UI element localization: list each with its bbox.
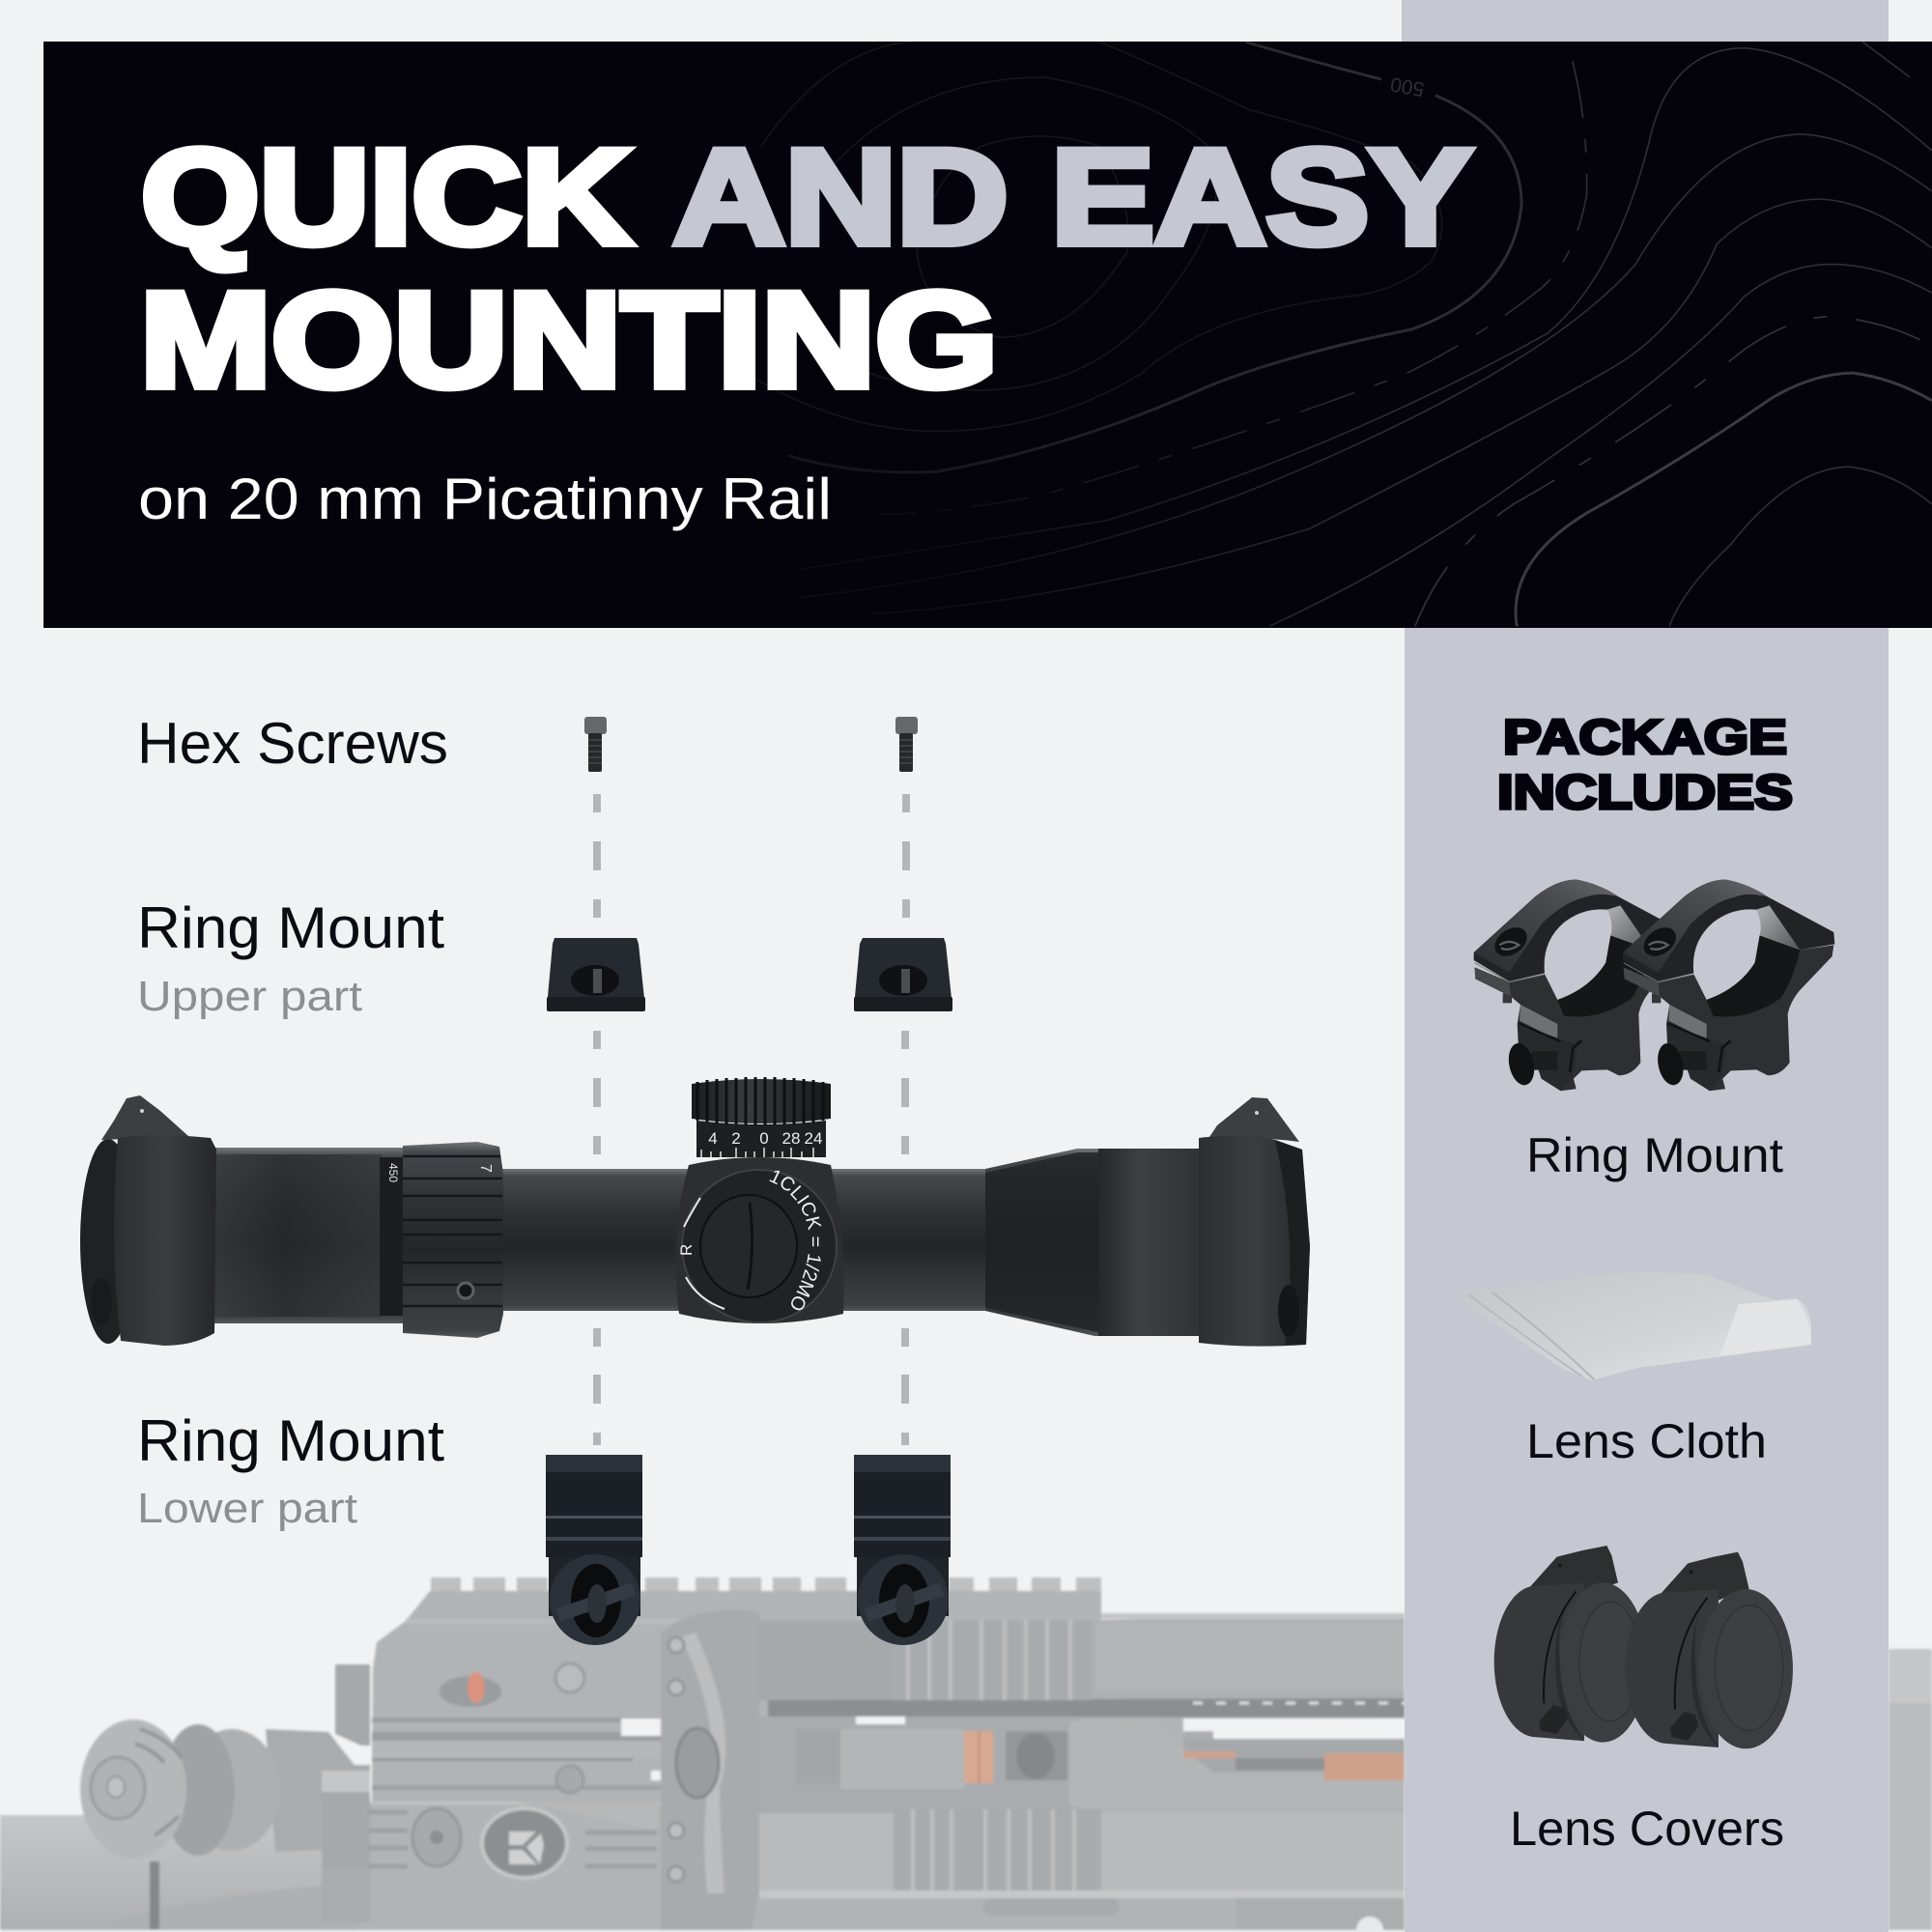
rifle logo xyxy=(480,1806,569,1880)
knurled grips xyxy=(892,1620,1101,1890)
label: upper part: Upper part xyxy=(137,973,362,1020)
elevation turret: 2 xyxy=(731,1129,741,1148)
magnification ring xyxy=(380,1142,503,1338)
contour label 500: 500 xyxy=(1389,72,1426,100)
icon: ring mount lower part left xyxy=(546,1455,642,1645)
label: lens cloth: Lens Cloth xyxy=(1526,1414,1767,1468)
title xyxy=(140,121,1472,415)
elevation turret: 4 xyxy=(708,1129,718,1148)
label: lower part: Lower part xyxy=(137,1485,357,1532)
right panel: package includes xyxy=(1402,0,1889,1932)
elevation turret: 0 xyxy=(759,1129,769,1148)
heading line: package: PACKAGE xyxy=(1503,710,1787,764)
icon: ring mounts xyxy=(1474,880,1834,1091)
elevation turret: 24 xyxy=(805,1129,822,1148)
copper parts xyxy=(964,1731,993,1783)
title word: quick: QUICK xyxy=(141,121,632,272)
label: ring mount lower: Ring Mount xyxy=(137,1408,444,1473)
rifle knob xyxy=(80,1719,370,1929)
ocular tube xyxy=(203,1148,406,1323)
dark band xyxy=(768,1698,1405,1718)
mid block xyxy=(759,1717,1078,1813)
right ring mount xyxy=(1623,880,1834,1091)
heading line: includes: INCLUDES xyxy=(1497,765,1793,819)
label: lens covers: Lens Covers xyxy=(1510,1802,1784,1856)
icon: ring mount upper part left xyxy=(547,938,645,1011)
elevation turret: 28 xyxy=(782,1129,800,1148)
receiver details xyxy=(335,1664,370,1746)
icon: lens covers xyxy=(1494,1546,1793,1748)
vertical plate xyxy=(661,1609,759,1930)
elevation turret xyxy=(692,1077,831,1157)
label: ring mount: Ring Mount xyxy=(1526,1128,1783,1182)
magnification ring: 450 xyxy=(386,1163,400,1182)
lower beam xyxy=(759,1813,1405,1890)
left eye cover xyxy=(80,1095,216,1346)
rifle scope xyxy=(80,1077,1310,1347)
windage dial xyxy=(677,1169,838,1323)
panel top strip xyxy=(1402,0,1889,42)
rail block and receiver xyxy=(355,1591,1405,1930)
background rifle photo xyxy=(0,1577,1932,1932)
label: hex screws: Hex Screws xyxy=(137,711,448,776)
objective flare xyxy=(985,1149,1203,1336)
icon: ring mount upper part right xyxy=(854,938,952,1011)
right lens cover xyxy=(1625,1552,1793,1748)
title words: and easy: AND EASY xyxy=(673,121,1472,272)
icon: hex screw left xyxy=(584,717,607,772)
icon: hex screw right xyxy=(895,717,918,772)
icon: ring mount lower part right xyxy=(854,1455,951,1645)
banner xyxy=(43,42,1932,628)
stock xyxy=(0,1815,386,1930)
title word: mounting: MOUNTING xyxy=(140,264,998,415)
windage dial: R xyxy=(677,1244,696,1256)
left labels xyxy=(137,711,448,1532)
label: ring mount upper: Ring Mount xyxy=(137,895,444,960)
mid tube xyxy=(497,1169,990,1311)
dashed guide lines xyxy=(593,794,910,1445)
left lens cover xyxy=(1494,1546,1647,1743)
icon: lens cloth xyxy=(1458,1271,1811,1380)
top beam xyxy=(759,1620,1405,1700)
magnification ring: 7 xyxy=(477,1164,494,1173)
topographic contour lines xyxy=(734,42,1932,626)
windage dial: 1CLICK = 1/2MOA xyxy=(769,1171,821,1310)
right objective cover xyxy=(1199,1097,1310,1347)
package heading xyxy=(1497,710,1793,819)
light gaps in rifle xyxy=(621,1717,1405,1780)
windage turret housing xyxy=(675,1157,843,1323)
subtitle: on 20 mm Picatinny Rail xyxy=(138,467,832,531)
left ring mount xyxy=(1474,880,1686,1091)
rail teeth xyxy=(431,1577,1101,1592)
